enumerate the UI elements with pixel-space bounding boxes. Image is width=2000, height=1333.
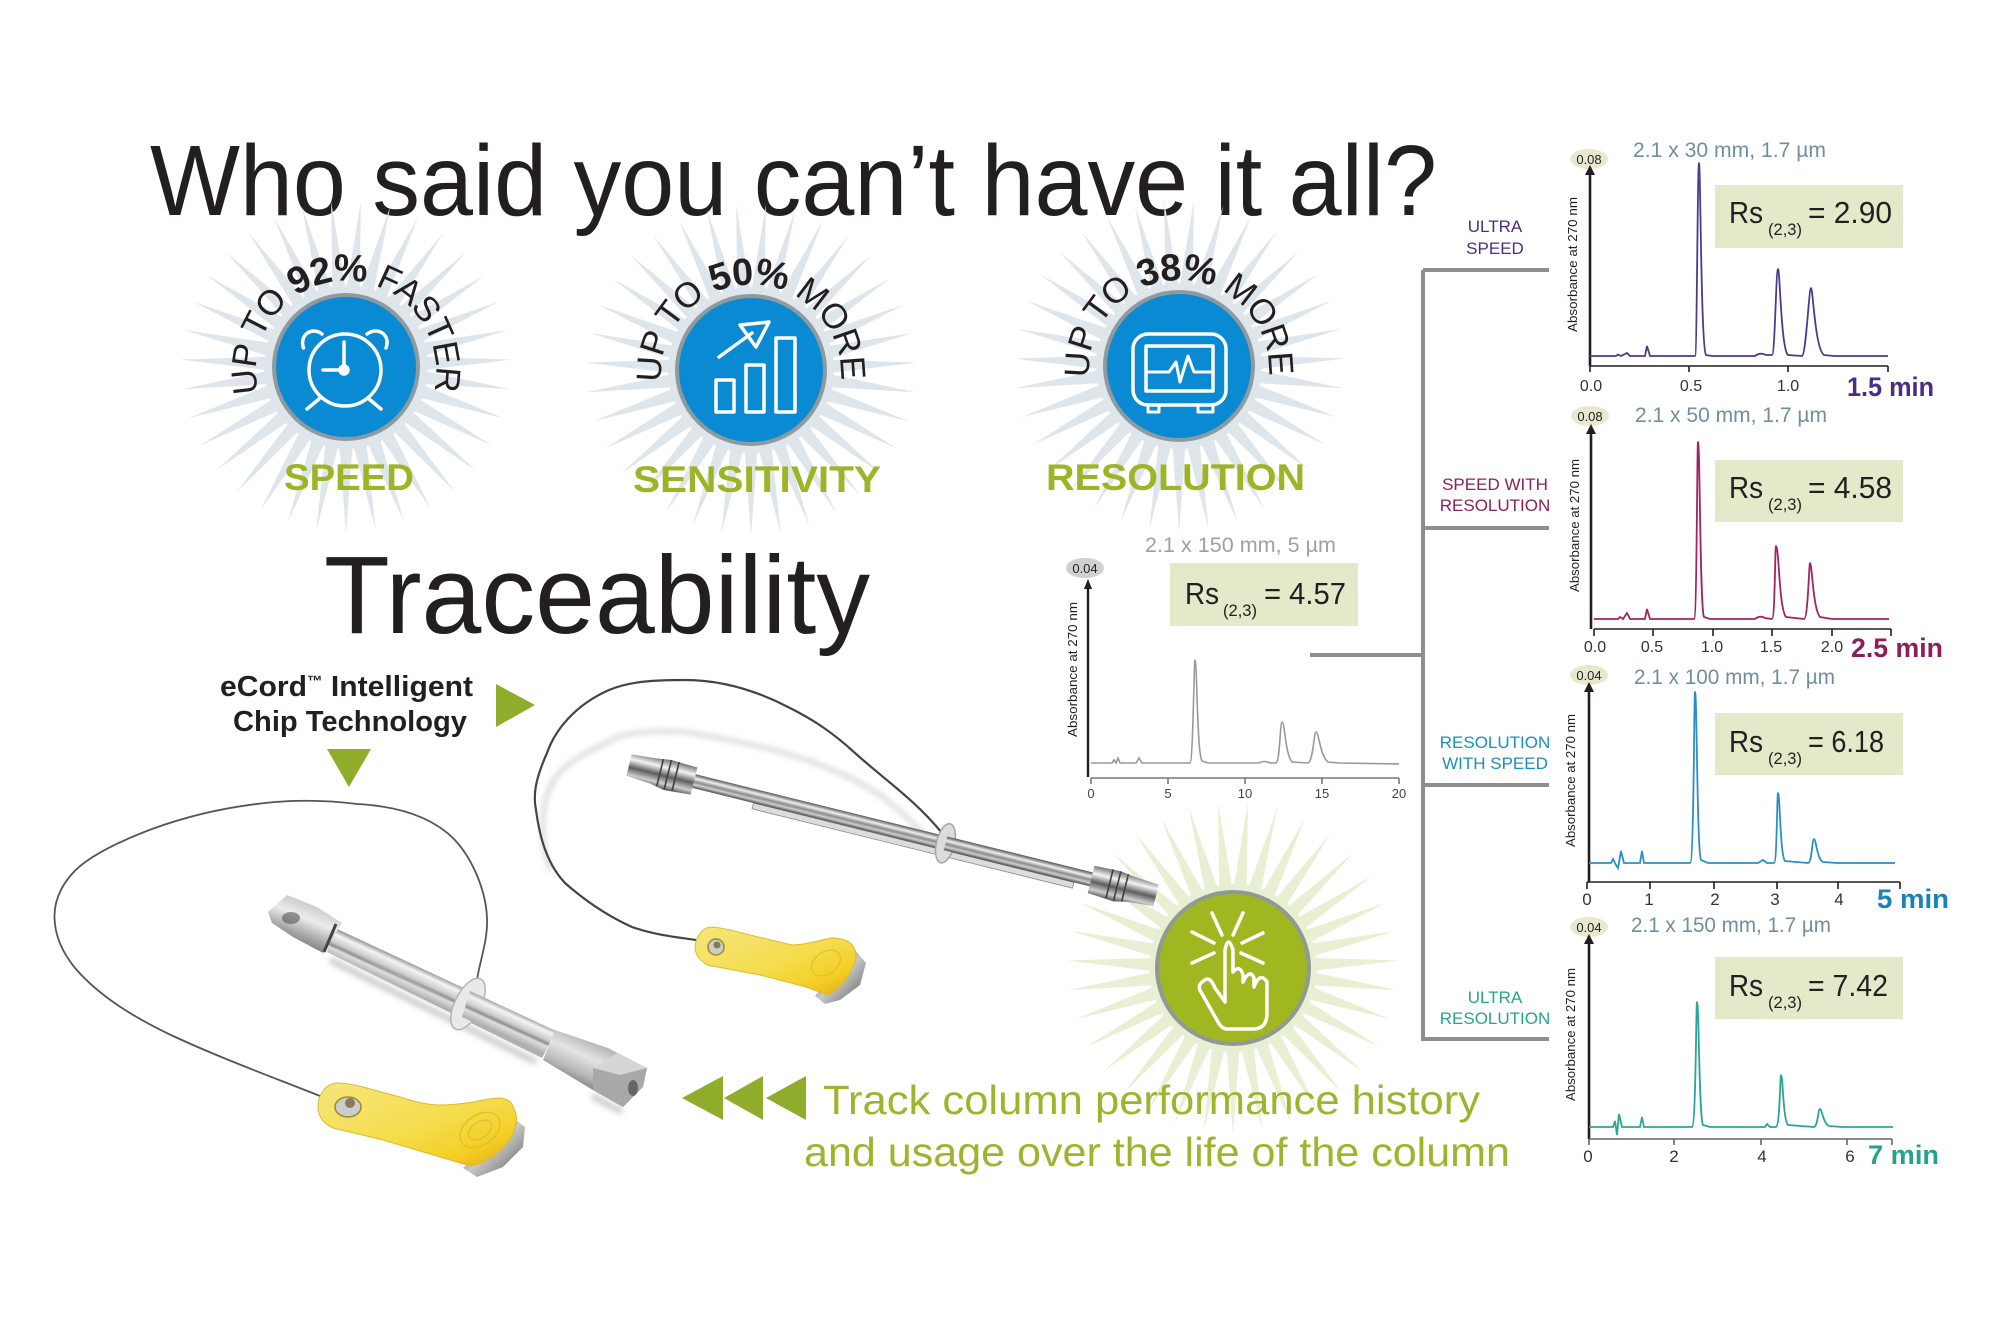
label: ultra speed (1466, 217, 1524, 258)
y axis label: Absorbance at 270 nm (1065, 602, 1080, 737)
icon: rising bars (716, 322, 795, 412)
label: ultra speed: ULTRA (1468, 217, 1523, 236)
y axis label: Absorbance at 270 nm (1563, 714, 1578, 847)
chart: 2.1 x 30 mm, 1.7 um (1565, 139, 1934, 402)
product: column with ecord, right (535, 680, 1161, 1004)
label: ultra resolution: ULTRA (1468, 988, 1523, 1007)
arrow: down (327, 749, 371, 787)
rs value: = 7.42 (1808, 968, 1888, 1003)
scale oval: 0.08 (1577, 409, 1603, 424)
label: speed with resolution: SPEED WITH (1442, 475, 1548, 494)
x axis labels: 1.0 (1701, 639, 1723, 656)
text: track column performance: Track column performance history (823, 1077, 1481, 1123)
burst: sensitivity (585, 204, 917, 536)
curved text: up to 38% more: UP TO 38% MORE (1064, 254, 1294, 374)
x axis (1594, 629, 1891, 636)
callout: ecord chip technology: Intelligent (323, 671, 473, 703)
cord: right (535, 680, 942, 940)
text: track column performance (804, 1077, 1510, 1175)
callout: ecord chip technology (220, 671, 473, 738)
callout: ecord chip technology: ™ (307, 673, 323, 690)
curved text: up to 50% more: UP TO 50% MORE (636, 258, 866, 379)
x axis labels (1582, 890, 1844, 909)
cord: left (54, 801, 487, 1096)
y axis (1590, 429, 1592, 629)
trace (1594, 442, 1889, 619)
x axis labels: 4 (1834, 890, 1844, 909)
x axis labels (1580, 378, 1799, 395)
x axis labels: 15 (1315, 786, 1329, 801)
rs value: = 4.58 (1808, 470, 1892, 505)
rs value (1729, 195, 1892, 239)
yellow tag: left (318, 1083, 516, 1165)
y axis (1087, 586, 1089, 777)
column size: 2.1 x 30 mm, 1.7 µm (1633, 139, 1826, 162)
x axis labels: 0 (1583, 1147, 1593, 1166)
icon: alarm clock (303, 331, 387, 409)
rs value: Rs (1185, 576, 1219, 611)
label: resolution with speed: WITH SPEED (1442, 754, 1548, 773)
trace (1091, 660, 1399, 764)
run time: 1.5 min (1847, 372, 1934, 402)
badge: speed (182, 202, 511, 532)
rs box (1715, 957, 1903, 1019)
y axis label: Absorbance at 270 nm (1567, 459, 1582, 592)
metal button: right (815, 950, 866, 1004)
curved text: up to 92% faster: UP TO 92% FASTER (232, 254, 460, 394)
x axis labels: 20 (1392, 786, 1406, 801)
y axis label: Absorbance at 270 nm (1565, 197, 1580, 332)
x axis labels: 1.5 (1760, 639, 1782, 656)
chart: 2.1 x 150 mm, 1.7 um (1563, 914, 1939, 1170)
rs value: = 6.18 (1808, 724, 1884, 759)
chart: 2.1 x 100 mm, 1.7 um (1563, 665, 1949, 914)
cord shadow (542, 731, 925, 870)
circle: speed (274, 295, 418, 439)
x axis labels: 1.0 (1777, 378, 1799, 395)
title: Who said you can’t have it all? (150, 125, 1437, 237)
x axis labels (1584, 639, 1843, 656)
rs value: (2,3) (1768, 993, 1802, 1012)
yellow tag: right (695, 927, 856, 994)
scale oval: 0.04 (1576, 920, 1602, 935)
x axis labels: 2.0 (1821, 639, 1843, 656)
x axis labels (1583, 1147, 1855, 1166)
scale oval: 0.04 (1576, 668, 1602, 683)
rs value: = 4.57 (1264, 576, 1346, 611)
x axis (1590, 366, 1888, 372)
burst: click (1067, 802, 1399, 1134)
x axis labels: 2 (1669, 1147, 1679, 1166)
run time: 2.5 min (1851, 633, 1943, 663)
callout: ecord chip technology: eCord (220, 671, 304, 703)
chart: 2.1 x 150 mm, 5 um (1065, 534, 1406, 801)
trace (1590, 163, 1888, 356)
y axis (1589, 171, 1591, 366)
column size: 2.1 x 50 mm, 1.7 µm (1635, 404, 1827, 427)
rs box (1715, 185, 1903, 248)
label: sensitivity: SENSITIVITY (633, 459, 881, 500)
scale oval (1570, 665, 1608, 685)
x axis labels: 10 (1238, 786, 1252, 801)
x axis labels: 0 (1582, 890, 1592, 909)
circle: click (1157, 892, 1309, 1044)
arrow: right (496, 684, 535, 727)
label: ultra speed: SPEED (1466, 239, 1524, 258)
column size: 2.1 x 150 mm, 1.7 µm (1631, 914, 1831, 937)
rs value: Rs (1729, 470, 1763, 505)
scale oval (1570, 917, 1608, 937)
product: column with ecord, left (54, 801, 647, 1177)
scale oval (1571, 406, 1609, 426)
scale oval: 0.04 (1072, 561, 1098, 576)
run time: 5 min (1877, 884, 1949, 914)
icon: hand click (1192, 913, 1267, 1029)
x axis labels: 0.5 (1641, 639, 1663, 656)
label: speed with resolution: RESOLUTION (1440, 496, 1550, 515)
column size: 2.1 x 100 mm, 1.7 µm (1634, 666, 1835, 689)
rs value: Rs (1729, 195, 1763, 230)
x axis labels: 6 (1845, 1147, 1855, 1166)
y axis (1588, 687, 1590, 882)
y axis label: Absorbance at 270 nm (1563, 968, 1578, 1101)
text: track column performance: and usage over the life of the column (804, 1129, 1510, 1175)
column: left (268, 895, 647, 1107)
trace (1589, 692, 1895, 868)
icon: monitor (1133, 334, 1226, 412)
metal button: left (463, 1118, 525, 1177)
x axis labels: 0.0 (1584, 639, 1606, 656)
label: ultra resolution (1440, 988, 1550, 1028)
scale oval (1570, 149, 1608, 169)
rs value: Rs (1729, 968, 1763, 1003)
connector lines (1310, 270, 1549, 1039)
column size: 2.1 x 150 mm, 5 µm (1145, 534, 1336, 557)
label: resolution: RESOLUTION (1046, 457, 1305, 498)
y axis arrow (1584, 682, 1594, 692)
burst: resolution (1013, 200, 1345, 532)
label: resolution with speed (1440, 733, 1550, 773)
rs box (1715, 460, 1903, 522)
rs value (1185, 576, 1346, 620)
arrows: triple left (682, 1076, 806, 1120)
label: ultra resolution: RESOLUTION (1440, 1009, 1550, 1028)
rs box (1170, 563, 1358, 626)
x axis labels: 4 (1757, 1147, 1767, 1166)
y axis arrow (1584, 934, 1594, 944)
rs value (1729, 968, 1888, 1012)
rs value: (2,3) (1768, 749, 1802, 768)
rs value: Rs (1729, 724, 1763, 759)
callout: ecord chip technology: Chip Technology (233, 706, 467, 738)
badge: sensitivity (586, 204, 916, 534)
label: resolution with speed: RESOLUTION (1440, 733, 1550, 752)
tag details: left (335, 1097, 507, 1155)
rs value: = 2.90 (1808, 195, 1892, 230)
rs box (1715, 713, 1903, 775)
label: speed with resolution (1440, 475, 1550, 515)
rs value: (2,3) (1768, 220, 1802, 239)
scale oval: 0.08 (1576, 152, 1602, 167)
x axis labels: 0.0 (1580, 378, 1602, 395)
tag details: right (708, 939, 845, 981)
rs value: (2,3) (1768, 495, 1802, 514)
circle: sensitivity (677, 296, 825, 444)
rs value: (2,3) (1223, 601, 1257, 620)
x axis labels (1087, 786, 1406, 801)
x axis labels: 2 (1710, 890, 1720, 909)
x axis labels: 5 (1164, 786, 1172, 801)
x axis labels: 3 (1770, 890, 1780, 909)
x axis (1587, 882, 1900, 889)
circle: resolution (1105, 292, 1253, 440)
trace (1589, 1002, 1893, 1135)
x axis labels: 0.5 (1680, 378, 1702, 395)
rs value (1729, 724, 1884, 768)
y axis arrow (1084, 579, 1092, 589)
y axis (1588, 939, 1590, 1139)
badge: resolution (1014, 202, 1344, 530)
column: right (624, 746, 1161, 915)
x axis labels: 1 (1644, 890, 1654, 909)
column shadow: left (330, 960, 622, 1112)
x axis (1091, 778, 1399, 784)
x axis labels: 0 (1087, 786, 1095, 801)
rs value (1729, 470, 1892, 514)
scale oval (1066, 558, 1104, 578)
y axis arrow (1585, 165, 1595, 175)
chart: 2.1 x 50 mm, 1.7 um (1567, 404, 1943, 663)
burst: speed (180, 201, 512, 533)
run time: 7 min (1868, 1140, 1939, 1170)
label: speed: SPEED (284, 457, 414, 498)
heading: traceability: Traceability (324, 534, 870, 657)
y axis arrow (1586, 424, 1596, 434)
x axis (1589, 1139, 1892, 1145)
